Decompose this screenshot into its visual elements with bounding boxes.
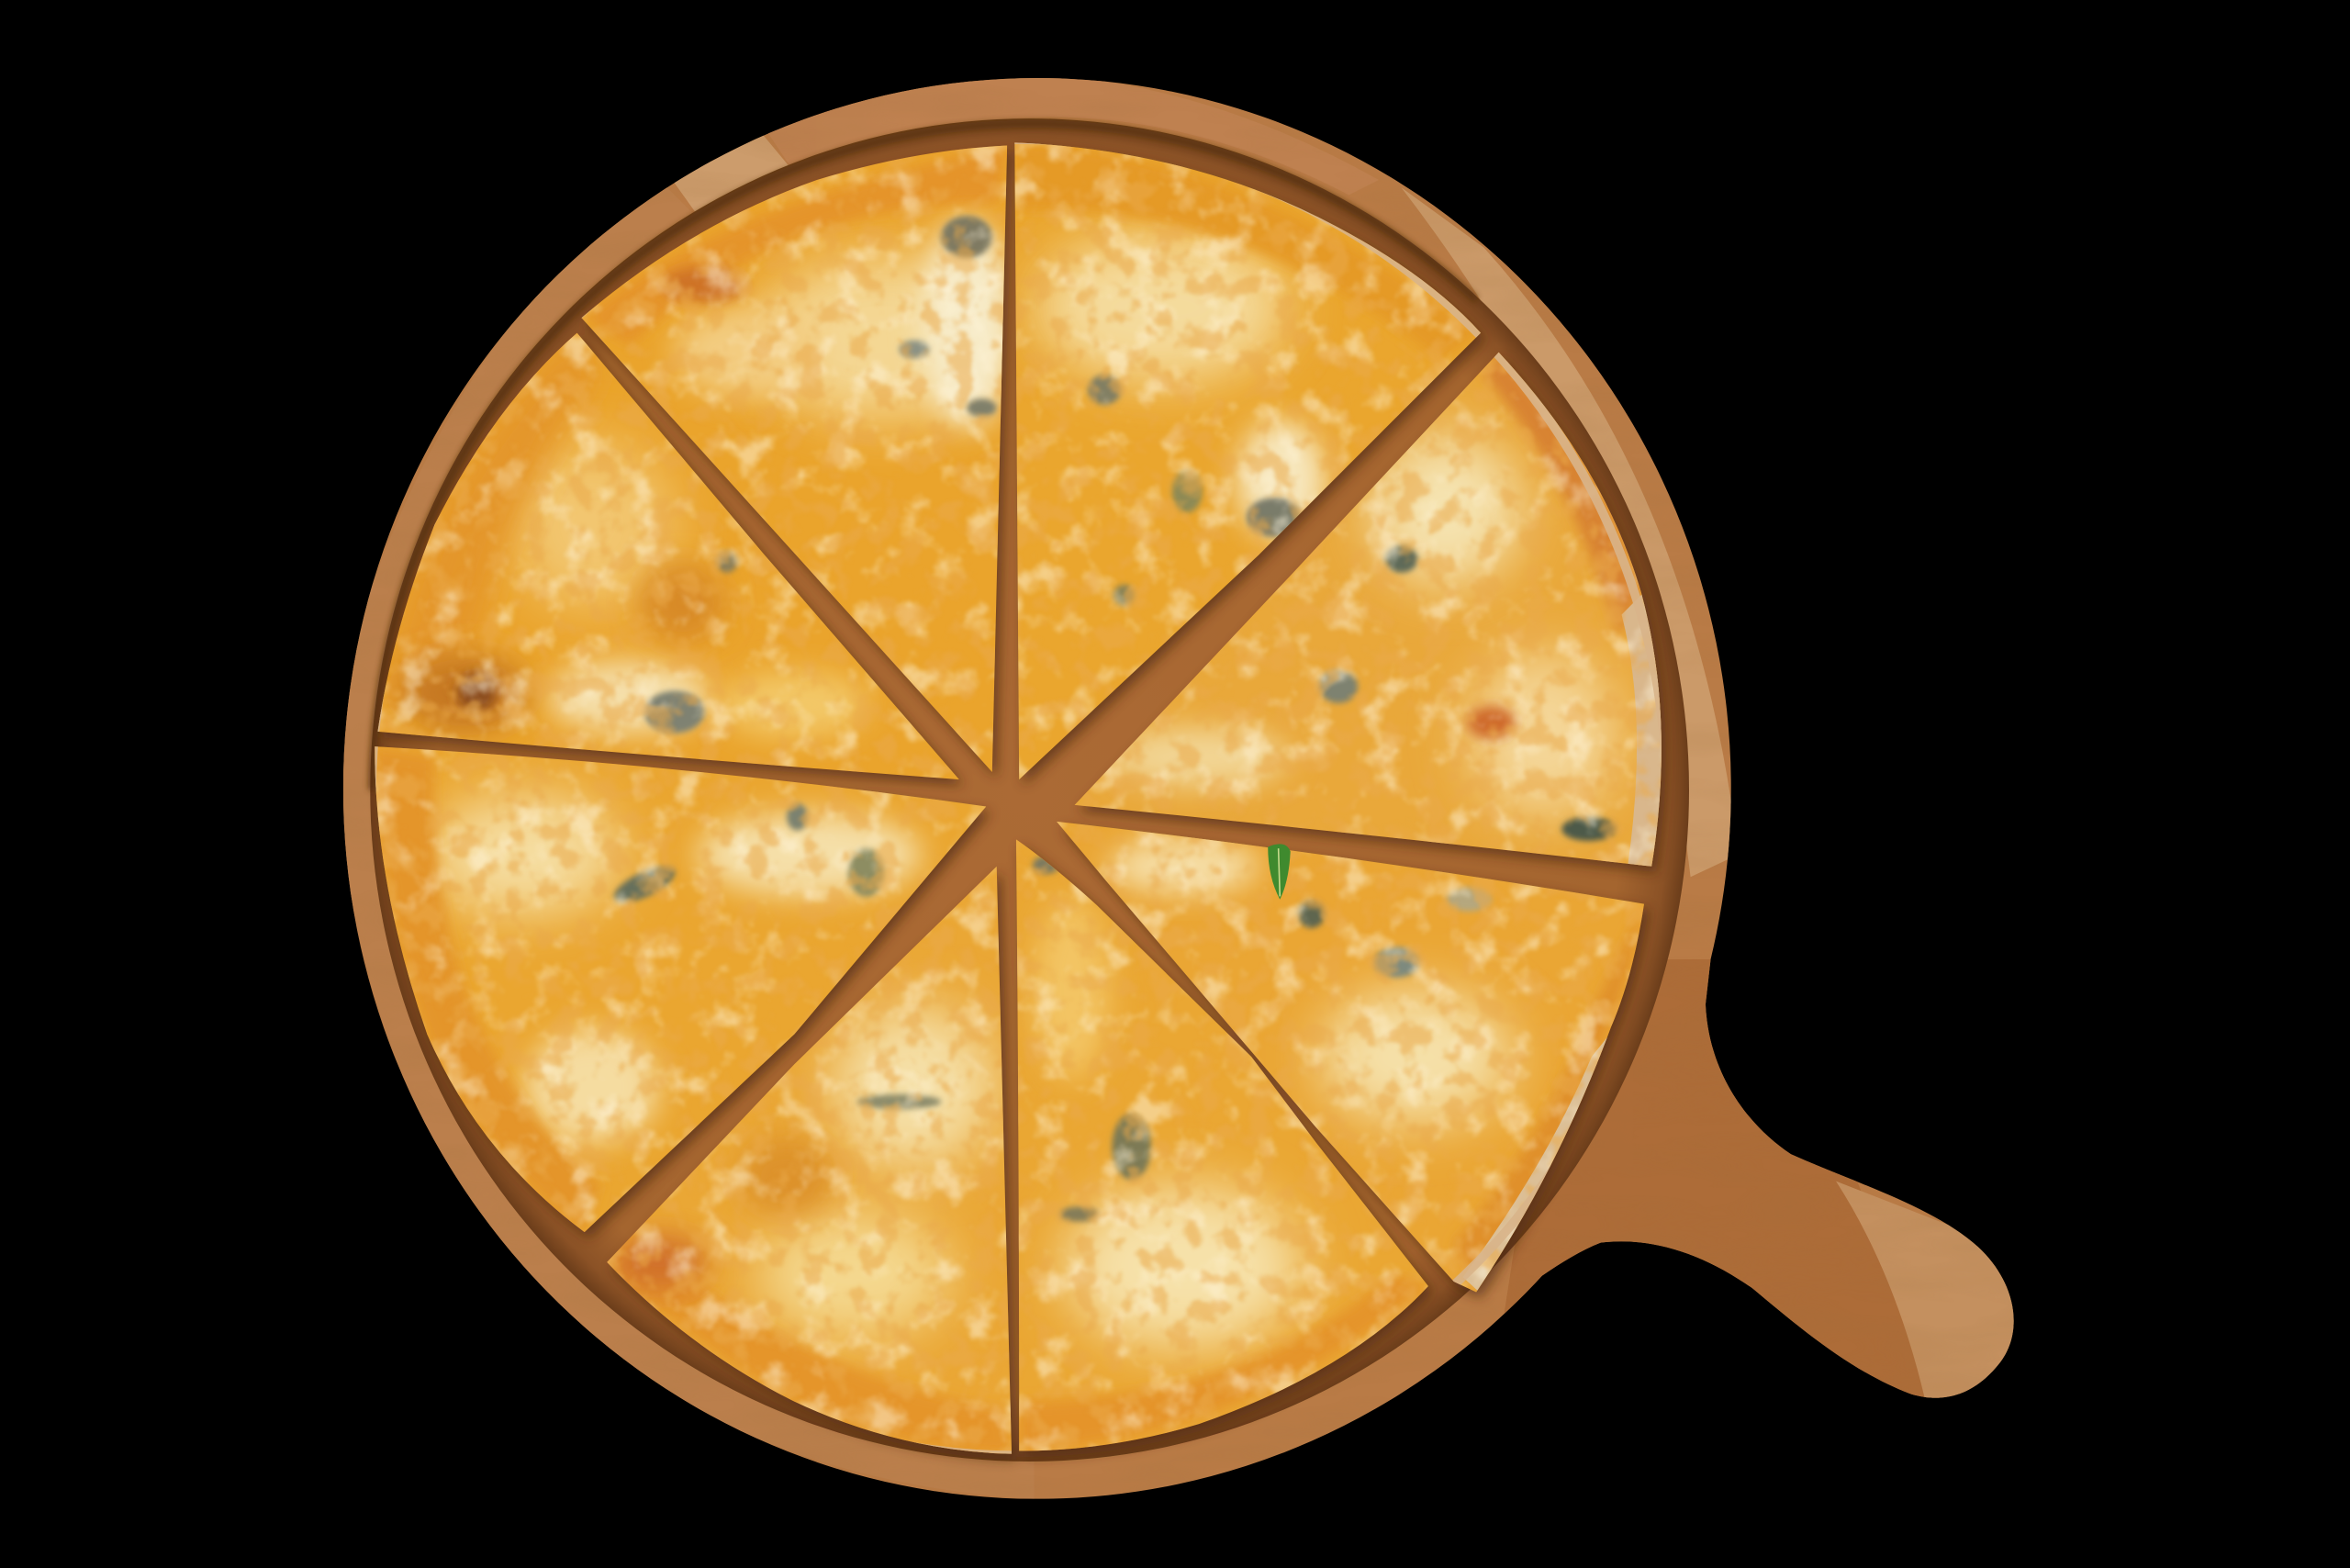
rim: lighter top-left block: [674, 136, 788, 211]
rim: light right block: [1402, 187, 1739, 877]
handle: darker centre block: [1499, 959, 1941, 1402]
rim: lower left block: [337, 779, 1035, 1499]
rim: left block: [343, 187, 667, 777]
slice: lower left: [367, 742, 997, 1244]
slice: top right: [1004, 135, 1499, 794]
crust rim: [372, 140, 1667, 1455]
illustration: pizza on wooden board: [343, 78, 2014, 1499]
slice: upper left: [367, 330, 967, 787]
wooden board with handle: [330, 60, 2038, 1514]
slice: bottom right: [1012, 832, 1438, 1454]
handle: light end block: [1836, 1181, 2014, 1398]
slice: upper right: [1064, 345, 1679, 877]
slice shadows: [379, 149, 1666, 1460]
cheese texture: [360, 135, 1679, 1462]
slice: bottom left: [599, 862, 1019, 1462]
slice: top left: [569, 135, 1019, 779]
board inner groove: [370, 118, 1689, 1462]
slice: lower right: [1049, 810, 1663, 1305]
pizza: [360, 135, 1679, 1462]
icon: basil leaf: [1268, 844, 1291, 900]
rim: top block: [765, 75, 1379, 195]
